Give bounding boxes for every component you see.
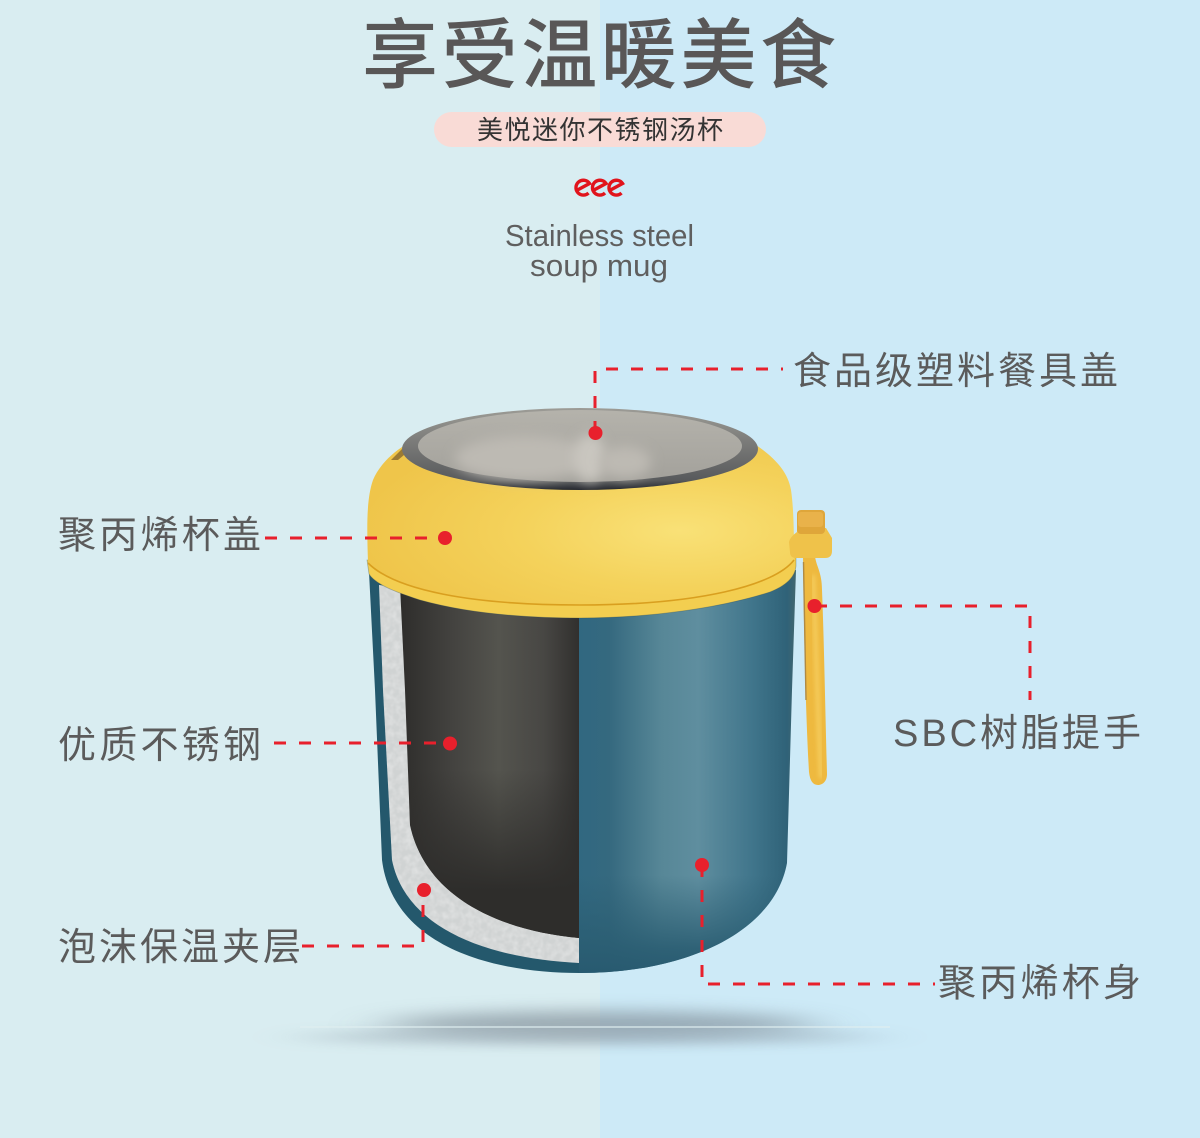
callout: foam insulation xyxy=(58,883,431,969)
callout: polypropylene body: 聚丙烯杯身 xyxy=(938,963,1141,1005)
callout: polypropylene lid: 聚丙烯杯盖 xyxy=(58,515,261,557)
callout: polypropylene body xyxy=(695,858,1141,1005)
mug handle bracket xyxy=(789,510,832,558)
callout: SBC resin handle xyxy=(808,599,1141,755)
title: 享受温暖美食 xyxy=(362,14,836,99)
callout: SBC resin handle: SBC树脂提手 xyxy=(893,713,1141,755)
callout: quality stainless steel: 优质不锈钢 xyxy=(58,725,261,767)
lid rim xyxy=(367,550,796,618)
callout: food-grade plastic cover xyxy=(588,351,1118,440)
callout: food-grade plastic cover: 食品级塑料餐具盖 xyxy=(793,351,1118,393)
lid seam xyxy=(368,560,794,605)
transparent top cover xyxy=(402,408,758,490)
callout: foam insulation: 泡沫保温夹层 xyxy=(58,927,301,969)
foam insulation layer xyxy=(379,585,579,963)
mug handle stem xyxy=(803,556,827,785)
mug body exterior xyxy=(579,570,796,973)
english subtitle: Stainless steel xyxy=(505,218,694,253)
callout: polypropylene lid xyxy=(58,515,452,557)
soup mug product illustration xyxy=(367,408,832,973)
yellow polypropylene lid xyxy=(367,445,794,605)
ground shadow xyxy=(300,1011,890,1044)
english subtitle xyxy=(505,218,694,283)
lid clip xyxy=(391,447,404,460)
subtitle pill xyxy=(434,112,766,147)
stainless steel liner xyxy=(400,585,579,938)
subtitle pill: 美悦迷你不锈钢汤杯 xyxy=(477,115,723,145)
icon: brand logo xyxy=(576,180,622,195)
english subtitle: soup mug xyxy=(530,248,668,283)
mug body outer shell xyxy=(369,572,580,973)
callout: quality stainless steel xyxy=(58,725,457,767)
